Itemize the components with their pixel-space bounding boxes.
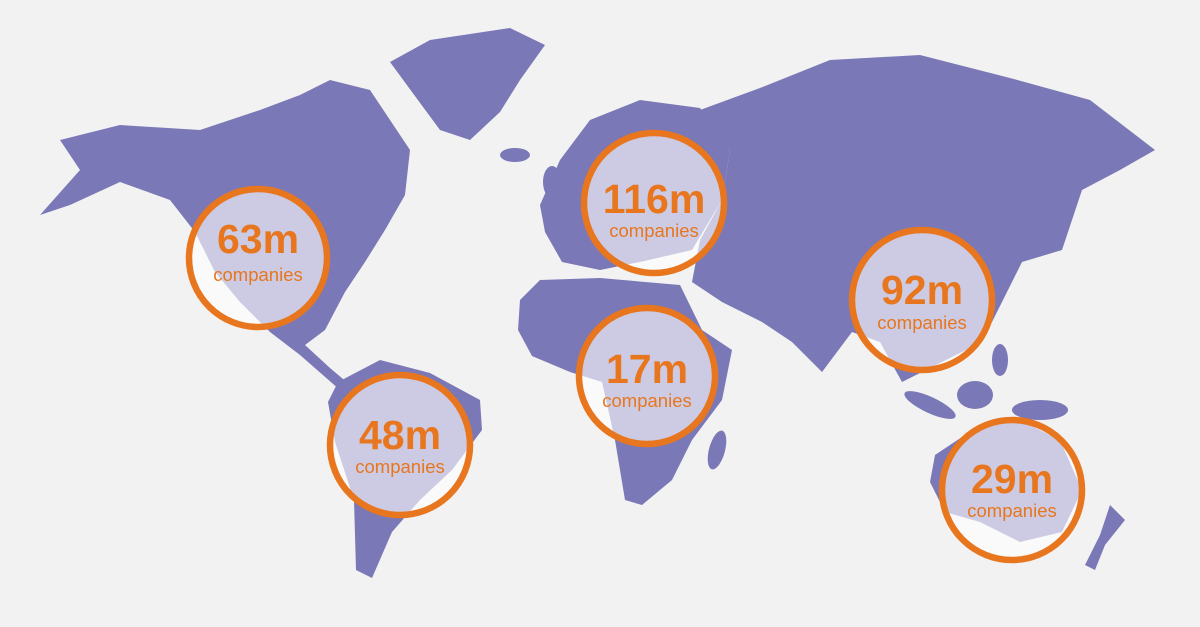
madagascar bbox=[704, 429, 730, 471]
circle: north america 63m: 63m bbox=[217, 216, 299, 262]
circle: south america 48m bbox=[330, 375, 470, 515]
circle: south america 48m: companies bbox=[355, 456, 445, 477]
japan bbox=[1000, 210, 1030, 275]
se asia islands bbox=[901, 386, 959, 424]
europe bbox=[540, 100, 730, 270]
new zealand bbox=[1085, 505, 1125, 570]
circle: australia 29m: 29m bbox=[971, 456, 1053, 502]
asia bbox=[692, 55, 1155, 382]
circle: asia 92m: 92m bbox=[881, 267, 963, 313]
circle: africa 17m bbox=[579, 308, 715, 444]
circle: asia 92m bbox=[852, 230, 992, 370]
uk bbox=[543, 166, 561, 198]
circle: australia 29m bbox=[942, 420, 1082, 560]
circle: europe 116m: companies bbox=[609, 220, 699, 241]
south america bbox=[328, 360, 482, 578]
circle: north america 63m bbox=[189, 189, 327, 327]
circle: south america 48m: 48m bbox=[359, 412, 441, 458]
iceland bbox=[500, 148, 530, 162]
circle: australia 29m: companies bbox=[967, 500, 1057, 521]
circle: africa 17m: 17m bbox=[606, 346, 688, 392]
circle: north america 63m: companies bbox=[213, 264, 303, 285]
circle: europe 116m bbox=[584, 133, 724, 273]
australia bbox=[930, 420, 1082, 542]
africa bbox=[518, 278, 732, 505]
circle: europe 116m: 116m bbox=[603, 176, 705, 222]
circle: asia 92m: companies bbox=[877, 312, 967, 333]
greenland bbox=[390, 28, 545, 140]
north america bbox=[40, 80, 410, 390]
circle: africa 17m: companies bbox=[602, 390, 692, 411]
